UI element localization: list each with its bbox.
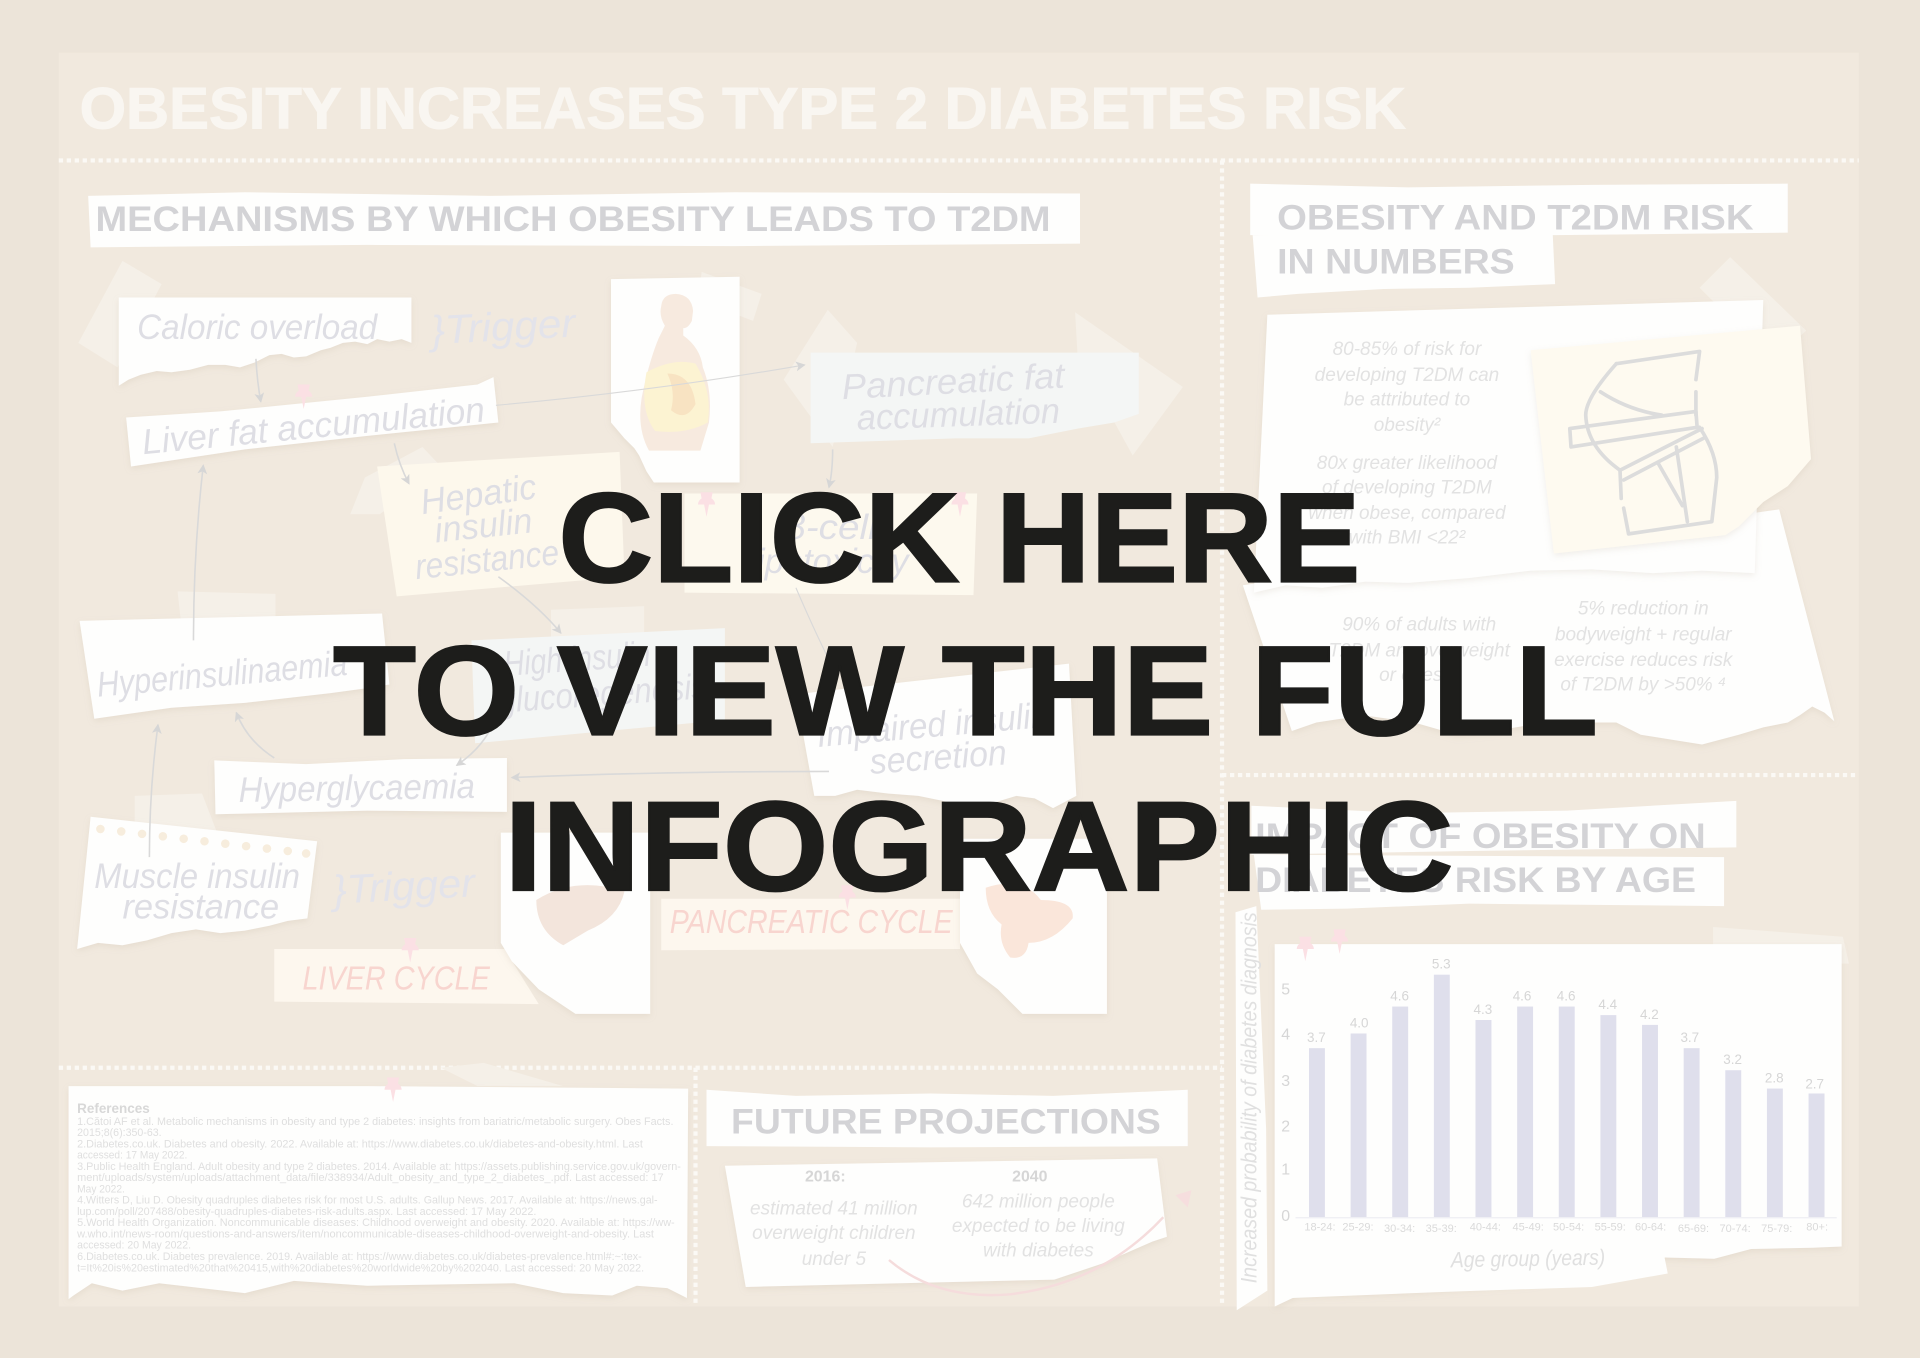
bar chart: 50-54:: [1553, 1222, 1584, 1234]
panel: future projections: [707, 1090, 1191, 1295]
stat: 2040: with diabetes: [983, 1240, 1094, 1261]
panel: impact of obesity by age: [1236, 801, 1849, 1310]
note: hepatic insulin resistance: [377, 452, 624, 596]
label: liver cycle: LIVER CYCLE: [302, 960, 491, 997]
text block: references: References: [77, 1101, 150, 1116]
heading: impact: IMPACT OF OBESITY ON: [1255, 816, 1706, 856]
paper: age axis label: [1275, 1243, 1668, 1298]
stat: risk reduction: bodyweight + regular: [1555, 624, 1732, 645]
tape: numbers panel: [1700, 257, 1806, 361]
bar chart: 40-44:: [1470, 1222, 1501, 1234]
bar chart: 4.4: [1598, 997, 1618, 1012]
text block: references: 2.Diabetes.co.uk. Diabetes and obesity. 2022. Available at: https://www.diabetes.co.uk/diabetes-and-obesity.html. Last: [77, 1138, 644, 1150]
paper: y axis label: [1236, 906, 1267, 1310]
panel: references: [69, 1063, 688, 1299]
bar chart: 45-49:: [1513, 1222, 1544, 1234]
stat: attributed risk: obesity²: [1374, 415, 1441, 436]
bar chart: 18-24:: [1304, 1222, 1336, 1234]
tape pieces: [78, 261, 1183, 857]
bar chart: 3.7: [1680, 1030, 1699, 1045]
text block: references: w.who.int/news-room/questions-and-answers/item/noncommunicable-diseases-childhood-overweight-and-obesity. Last: [76, 1228, 655, 1240]
image: pancreas: [960, 839, 1107, 1014]
image: body figure: [611, 277, 740, 482]
stat: attributed risk: developing T2DM can: [1315, 365, 1499, 386]
heading: mechanisms: MECHANISMS BY WHICH OBESITY LEADS TO T2DM: [96, 199, 1051, 239]
stat: 2016: [750, 1169, 918, 1270]
heading: numbers: OBESITY AND T2DM RISK: [1277, 198, 1754, 238]
note: impaired insulin secretion: secretion: [868, 732, 1008, 782]
paper: lower statistics: [1243, 509, 1834, 744]
note: impaired insulin secretion: [796, 664, 1076, 808]
stat: risk reduction: of T2DM by >50% ⁴: [1560, 675, 1726, 696]
stat: 2040: expected to be living: [952, 1216, 1125, 1237]
stat: attributed risk: [1315, 339, 1499, 436]
note: muscle insulin resistance: Muscle insulin: [94, 856, 300, 896]
stat: 2016: under 5: [802, 1249, 866, 1270]
text block: references: 2015;8(6):350-63.: [77, 1127, 162, 1139]
call to action overlay: TO VIEW THE FULL: [333, 620, 1598, 762]
note: muscle insulin resistance: [77, 817, 317, 949]
text block: references: 4.Witters D, Liu D. Obesity quadruples diabetes risk for most U.S. adults. Gallup News. 2017. Available at: https://news.gal-: [77, 1195, 658, 1207]
bar chart: 2.8: [1765, 1070, 1784, 1085]
label: liver cycle: [274, 949, 539, 1004]
bar chart: 75-79:: [1761, 1223, 1792, 1235]
heading: numbers: IN NUMBERS: [1277, 242, 1515, 282]
note: liver fat accumulation: Liver fat accumulation: [140, 389, 487, 462]
pin: references: [384, 1078, 402, 1102]
stat: attributed risk: be attributed to: [1344, 389, 1470, 410]
stat: 2016: estimated 41 million: [750, 1199, 918, 1220]
bar chart: 70-74:: [1719, 1223, 1751, 1235]
label: pancreatic cycle: PANCREATIC CYCLE: [670, 904, 953, 941]
stat: 2040: 2040: [1012, 1169, 1048, 1186]
bar chart: 4.3: [1474, 1002, 1492, 1017]
note: pancreatic fat accumulation: accumulation: [856, 391, 1061, 438]
text block: references: ment/uploads/system/uploads/attachment_data/file/338934/Adult_obesity_and_type_2_diabetes_.pdf. Last accessed: 17: [77, 1172, 664, 1184]
stat: adults overweight: T2DM are overweight: [1329, 640, 1511, 661]
note: beta-cell lipotoxicity: [684, 493, 977, 595]
image: liver: [501, 833, 650, 1014]
bar chart: 65-69:: [1678, 1223, 1709, 1235]
tape: references: [441, 1063, 563, 1086]
call to action overlay: CLICK HERE: [558, 467, 1360, 609]
bar chart: 80+:: [1806, 1222, 1828, 1234]
pins: [295, 384, 969, 962]
note: pancreatic fat accumulation: Pancreatic fat: [841, 355, 1068, 407]
bar chart: 25-29:: [1342, 1222, 1374, 1234]
arrows: cycle connections: [149, 359, 833, 857]
label: pancreatic cycle: [661, 899, 960, 950]
icon: waist measurement: [1570, 351, 1717, 534]
bar chart: 4.2: [1640, 1007, 1659, 1022]
text block: references: [76, 1101, 681, 1274]
stat: 2040: [952, 1169, 1125, 1261]
paper: projections: [725, 1158, 1167, 1287]
stat: greater likelihood: [1308, 453, 1507, 549]
bar chart: 4.6: [1513, 988, 1531, 1003]
sticky note: [1531, 326, 1811, 553]
bar chart: 4.6: [1557, 988, 1575, 1003]
text block: references: 1.Cătoi AF et al. Metabolic mechanisms in obesity and type 2 diabetes: insights from bariatric/metabolic surgery. Obes Facts.: [77, 1116, 673, 1128]
bar chart: 3.2: [1723, 1052, 1742, 1067]
heading: mechanisms: [88, 192, 1080, 247]
stat: greater likelihood: when obese, compared: [1308, 503, 1507, 524]
text block: references: accessed: 20 May 2022.: [77, 1240, 191, 1252]
text block: references: 3.Public Health England. Adult obesity and type 2 diabetes. 2014. Available at: https://assets.publishing.service.gov.uk/govern-: [77, 1161, 681, 1173]
note: muscle insulin resistance: resistance: [122, 886, 279, 926]
heading: future projections: FUTURE PROJECTIONS: [731, 1101, 1161, 1141]
note: hepatic insulin resistance: insulin: [433, 500, 534, 550]
stat: 2040: 642 million people: [962, 1191, 1115, 1212]
bar chart: 2: [1281, 1118, 1290, 1135]
stat: greater likelihood: with BMI <22²: [1349, 528, 1466, 549]
note: hepatic insulin resistance: Hepatic: [418, 466, 539, 522]
stat: attributed risk: 80-85% of risk for: [1333, 339, 1482, 360]
stat: risk reduction: 5% reduction in: [1578, 599, 1709, 620]
stat: 2016: 2016:: [805, 1169, 846, 1186]
bar chart: 30-34:: [1384, 1223, 1415, 1235]
note: pancreatic fat accumulation: [811, 353, 1139, 443]
bar chart: [1281, 957, 1837, 1235]
paper: upper statistics: [1254, 300, 1763, 593]
bar chart: 3: [1281, 1073, 1290, 1090]
bar chart: 35-39:: [1426, 1223, 1457, 1235]
stat: risk reduction: [1554, 599, 1734, 696]
text block: references: lup.com/poll/207488/obesity-quadruples-diabetes-risk-adults.aspx. Last accessed: 17 May 2022.: [77, 1206, 536, 1218]
bar chart: 5: [1281, 981, 1290, 998]
text block: references: May 2022.: [77, 1183, 125, 1195]
text block: references: 6.Diabetes.co.uk. Diabetes prevalence. 2019. Available at: https://www.diabetes.co.uk/diabetes-prevalence.html#:~:tex-: [77, 1251, 642, 1263]
stat: greater likelihood: 80x greater likelihood: [1317, 453, 1499, 474]
note: caloric overload: [119, 298, 411, 386]
bar chart: 0: [1281, 1208, 1290, 1225]
stat: adults overweight: or obese³: [1379, 665, 1460, 686]
paper: chart: [1275, 944, 1842, 1307]
panel: obesity and T2DM risk in numbers: [1243, 184, 1834, 744]
heading: impact: DIABETES RISK BY AGE: [1255, 860, 1696, 900]
heading: numbers: [1250, 184, 1788, 298]
bar chart: 60-64:: [1635, 1222, 1666, 1234]
pins: chart: [1297, 929, 1348, 961]
stat: risk reduction: exercise reduces risk: [1554, 650, 1734, 671]
heading: impact: [1251, 801, 1736, 910]
panel: mechanisms: [77, 192, 1183, 1014]
paper: y axis label: Increased probability of diabetes diagnosis: [1236, 912, 1261, 1283]
bar chart: 3.7: [1307, 1030, 1326, 1045]
note: high insulin glucoregenesis: High insulin: [502, 634, 652, 684]
stat: 2016: overweight children: [752, 1223, 916, 1244]
paper: age axis label: Age group (years): [1449, 1245, 1605, 1272]
heading: future projections: [707, 1090, 1188, 1147]
note: beta-cell lipotoxicity: β-cell: [783, 507, 878, 547]
label: trigger 2: }Trigger: [328, 859, 478, 913]
note: caloric overload: Caloric overload: [137, 307, 378, 347]
bar chart: 4.6: [1390, 988, 1409, 1003]
note: high insulin glucoregenesis: [471, 628, 725, 743]
bar chart: 2.7: [1805, 1077, 1824, 1092]
stat: greater likelihood: of developing T2DM: [1322, 477, 1492, 498]
text block: references: accessed: 17 May 2022.: [77, 1150, 187, 1162]
stat: adults overweight: 90% of adults with: [1342, 615, 1496, 636]
note: beta-cell lipotoxicity: lipotoxicity: [749, 541, 911, 581]
bar chart: 4: [1281, 1027, 1290, 1044]
text block: references: 5.World Health Organization. Noncommunicable diseases: Childhood overweight and obesity. 2020. Available at: https://ww-: [77, 1217, 675, 1229]
text block: references: t=It%20is%20estimated%20that%20415,with%20diabetes%20worldwide%20by%202040. Last accessed: 20 May 2022.: [77, 1262, 644, 1274]
label: trigger 1: }Trigger: [426, 300, 578, 353]
note: high insulin glucoregenesis: glucoregenesis: [497, 666, 708, 721]
bar chart: 4.0: [1350, 1015, 1369, 1030]
note: hyperinsulinaemia: [80, 613, 389, 719]
paper: references: [69, 1086, 688, 1299]
bar chart: 5.3: [1432, 957, 1451, 972]
bar chart: 1: [1281, 1161, 1290, 1178]
bar chart: 55-59:: [1595, 1222, 1626, 1234]
call to action overlay: [333, 467, 1598, 917]
note: impaired insulin secretion: Impaired insulin: [815, 695, 1050, 755]
note: hyperglycaemia: Hyperglycaemia: [238, 766, 475, 810]
tape: chart: [1713, 927, 1849, 964]
note: hyperglycaemia: [214, 758, 507, 814]
title: OBESITY INCREASES TYPE 2 DIABETES RISK: [80, 77, 1406, 142]
stat: adults overweight: [1329, 615, 1511, 686]
call to action overlay: INFOGRAPHIC: [504, 775, 1453, 917]
arrow: projections curve: [889, 1190, 1191, 1295]
note: hyperinsulinaemia: Hyperinsulinaemia: [95, 643, 349, 705]
note: hepatic insulin resistance: resistance: [413, 532, 561, 587]
